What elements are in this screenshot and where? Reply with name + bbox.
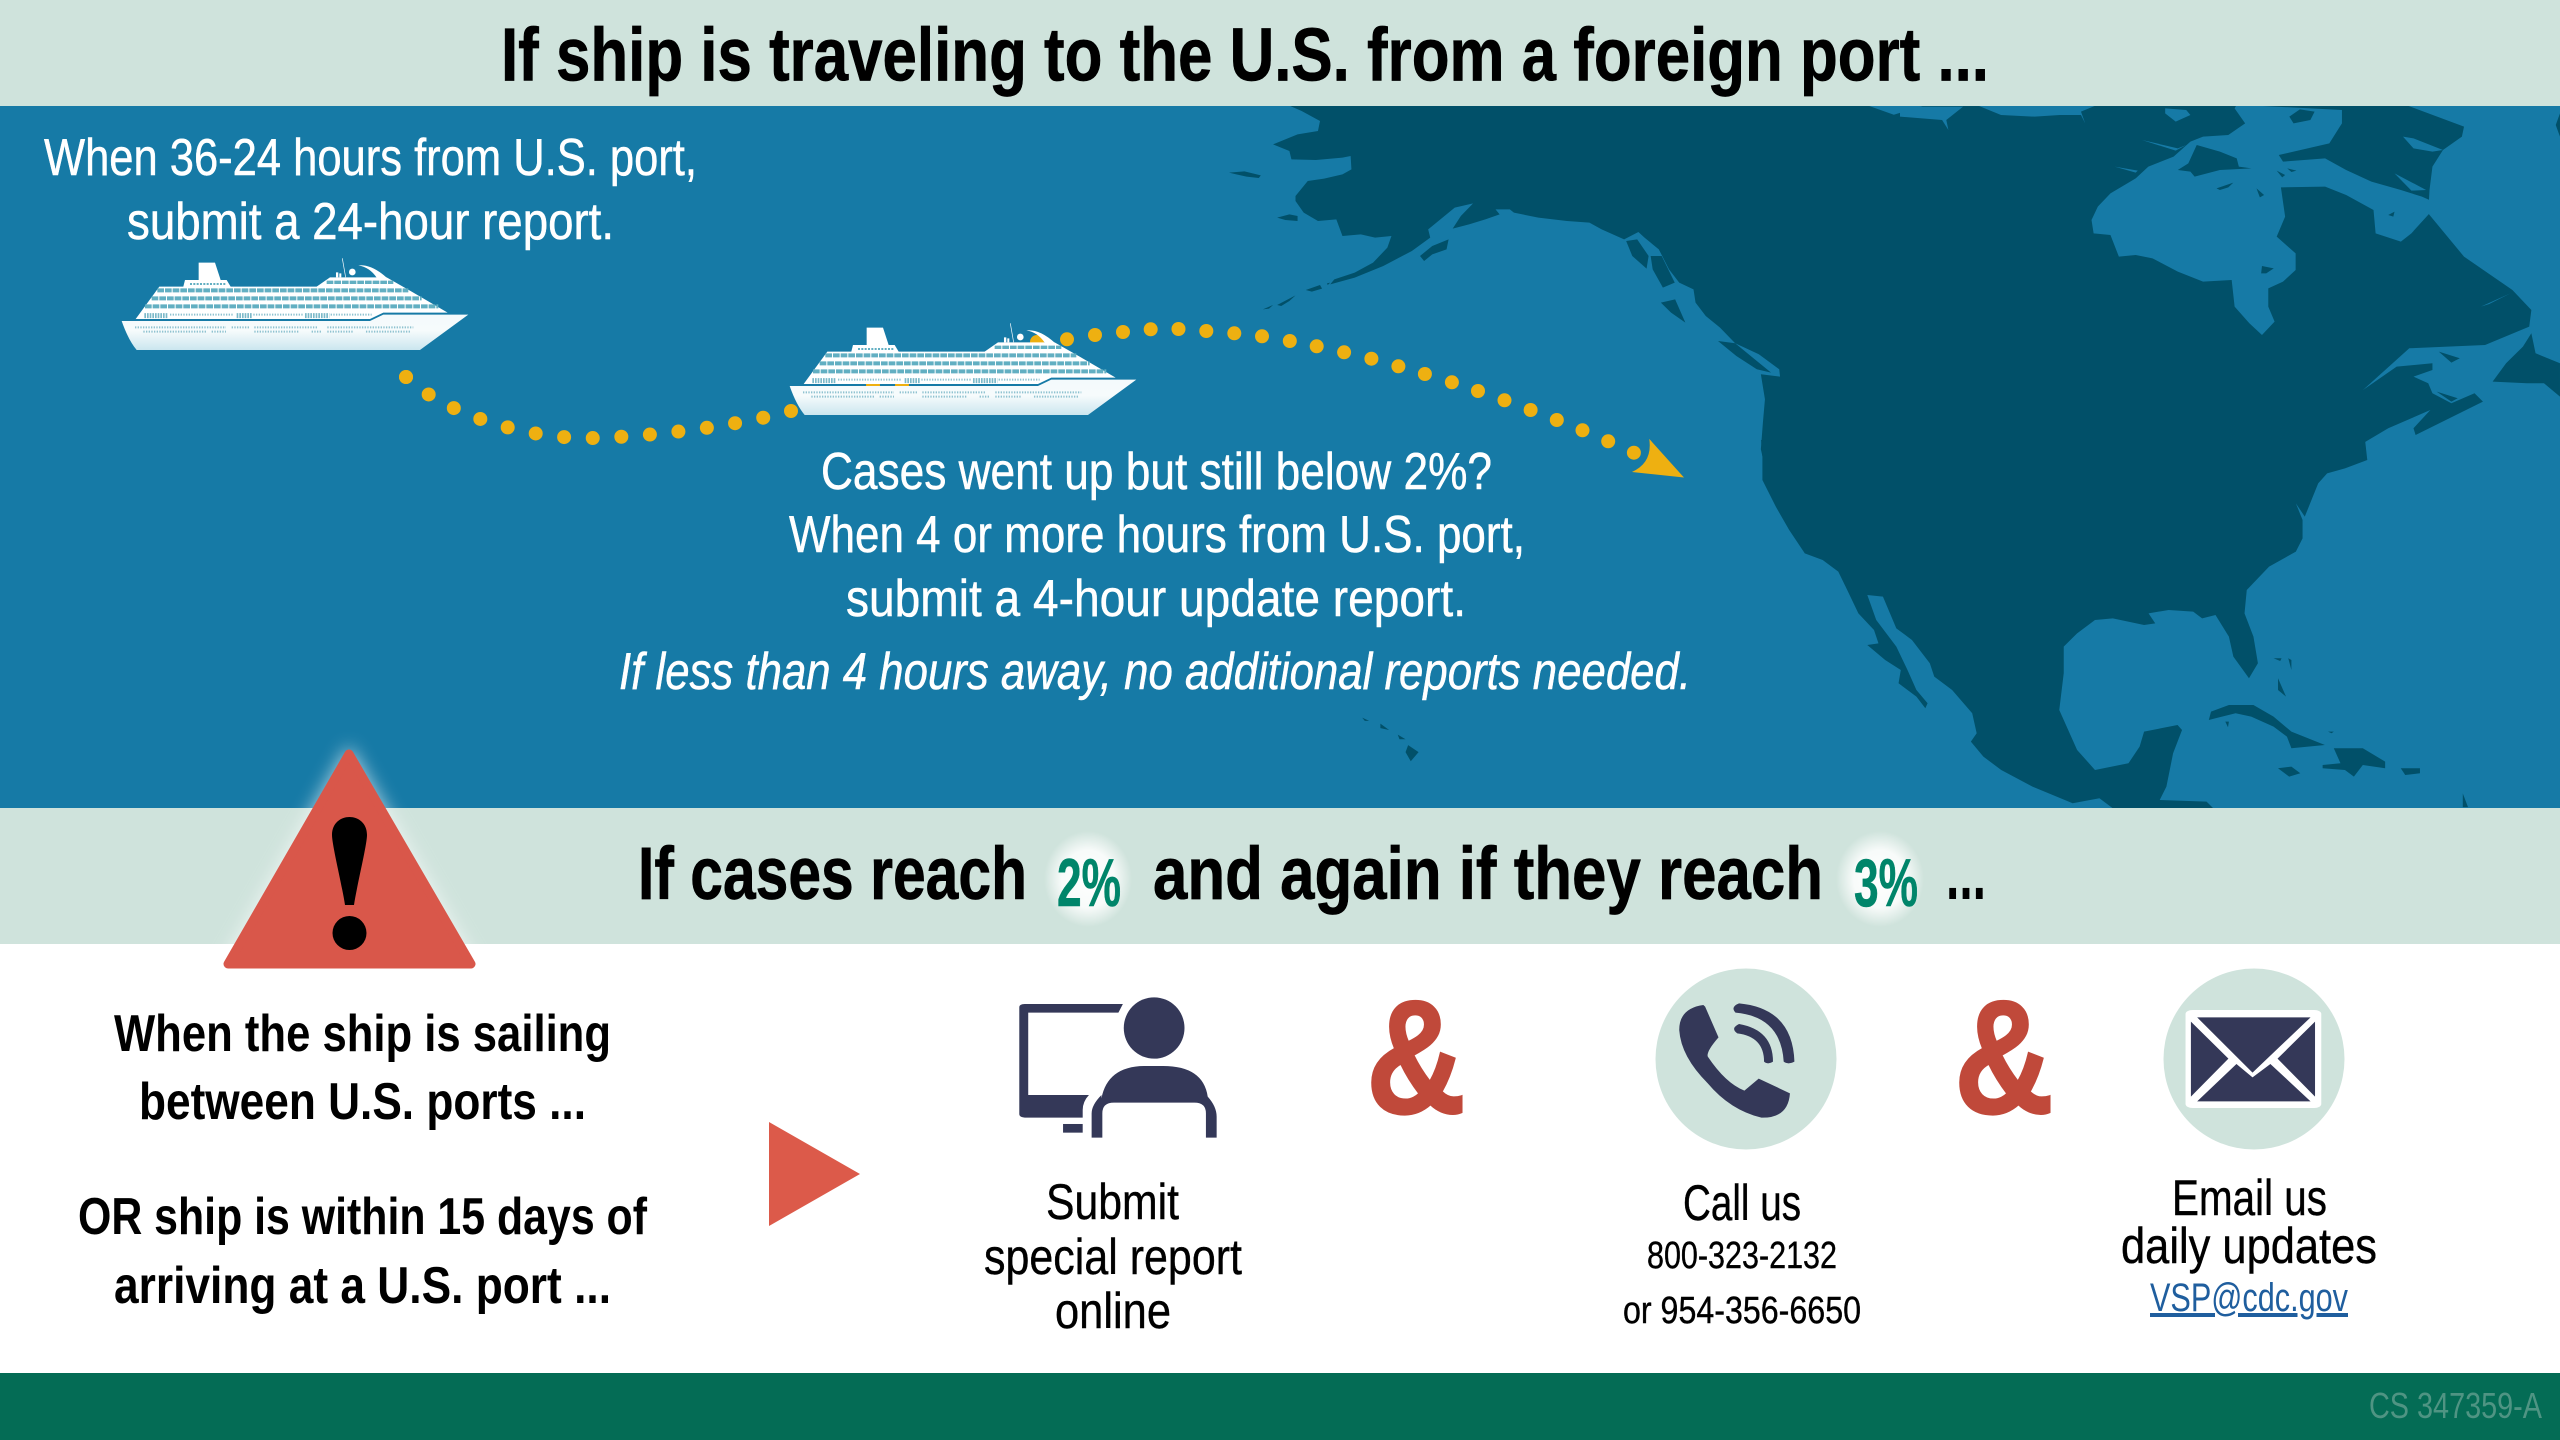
text: call us: or 954-356-6650: [1623, 1290, 1861, 1332]
text: email us: [2121, 1170, 2377, 1320]
text: 4-hour update report: If less than 4 hours away, no additional reports needed.: [619, 643, 1691, 701]
title: If ship is traveling to the U.S. from a foreign port ...: [501, 12, 1989, 96]
route: dotted path toward the U.S.: [1030, 322, 1641, 460]
land: Alaska and the Pacific northwest: [1229, 106, 1914, 468]
text: submit special report online: special report: [984, 1229, 1242, 1285]
islands: Bering Sea and Aleutians: [1229, 171, 1449, 309]
land: continental U.S. and Mexico: [1761, 440, 2420, 808]
icon: envelope in circle: [2164, 968, 2344, 1150]
text: submit special report online: [984, 1174, 1242, 1339]
text: conditions: When the ship is sailing: [114, 1005, 611, 1063]
ocean panel: [0, 106, 2560, 808]
text: email us: daily updates: [2121, 1218, 2377, 1274]
glow and label: 3%: [1836, 831, 1924, 927]
text: 4-hour update report: When 4 or more hours from U.S. port,: [789, 506, 1525, 564]
arrow: play triangle: [769, 1122, 860, 1226]
glow and label: 2%: 2%: [1057, 845, 1121, 921]
arrow head: [1632, 439, 1684, 477]
islands: Alexander Archipelago and Vancouver: [1626, 239, 1771, 373]
heading: if cases reach: [638, 831, 1986, 927]
text: call us: [1623, 1175, 1861, 1332]
heading: if cases reach: ...: [1946, 832, 1986, 915]
text: 24-hour report: submit a 24-hour report.: [127, 193, 614, 251]
text: submit special report online: Submit: [1046, 1174, 1179, 1230]
text: 4-hour update report: submit a 4-hour update report.: [846, 570, 1466, 628]
water: Hudson Bay and strait: [2092, 105, 2429, 335]
middle heading band: [0, 808, 2560, 944]
white lower panel: [0, 944, 2560, 1373]
text: submit special report online: online: [1055, 1283, 1171, 1339]
ampersand 2: &: [1954, 967, 2054, 1148]
text: conditions: [78, 1005, 648, 1315]
icon: cruise ship far: [122, 258, 468, 350]
land: Canada and the northeast: [1900, 105, 2560, 460]
text: call us: 800-323-2132: [1647, 1235, 1837, 1277]
heading: if cases reach: If cases reach: [638, 832, 1027, 915]
icon: cruise ship near: [790, 323, 1136, 415]
text: 24-hour report: [44, 129, 697, 251]
text: 4-hour update report: [619, 443, 1691, 701]
land: Southampton and small bay islands: [2178, 109, 2460, 402]
text: conditions: arriving at a U.S. port ...: [114, 1257, 611, 1315]
icon: person at computer: [1019, 997, 1217, 1138]
heading: if cases reach: and again if they reach: [1153, 832, 1823, 915]
land: Greenland edge: [2556, 113, 2560, 137]
route: dotted path to first ship position: [399, 370, 909, 438]
text: call us: Call us: [1683, 1175, 1801, 1231]
text: email us: VSP@cdc.gov: [2150, 1276, 2348, 1320]
top heading band: [0, 0, 2560, 106]
footer band: [0, 1373, 2560, 1440]
text: conditions: between U.S. ports ...: [139, 1073, 586, 1131]
text: conditions: OR ship is within 15 days of: [78, 1188, 648, 1246]
glow and label: 3%: 3%: [1854, 845, 1918, 921]
islands: Caribbean: [2209, 658, 2420, 777]
text: 4-hour update report: Cases went up but still below 2%?: [821, 443, 1492, 501]
warning triangle with exclamation mark: [228, 754, 471, 964]
map: North America: [1229, 105, 2560, 808]
land: Hawaii and small details: [1362, 106, 2468, 807]
icon: phone in circle: [1656, 968, 1836, 1150]
water: Arctic channels: [1900, 105, 2510, 307]
text: email us: Email us: [2172, 1170, 2327, 1226]
text: 24-hour report: When 36-24 hours from U.S. port,: [44, 129, 697, 187]
glow and label: 2%: [1044, 831, 1132, 927]
ampersand 1: &: [1366, 967, 1466, 1148]
land: Newfoundland: [2493, 333, 2560, 397]
